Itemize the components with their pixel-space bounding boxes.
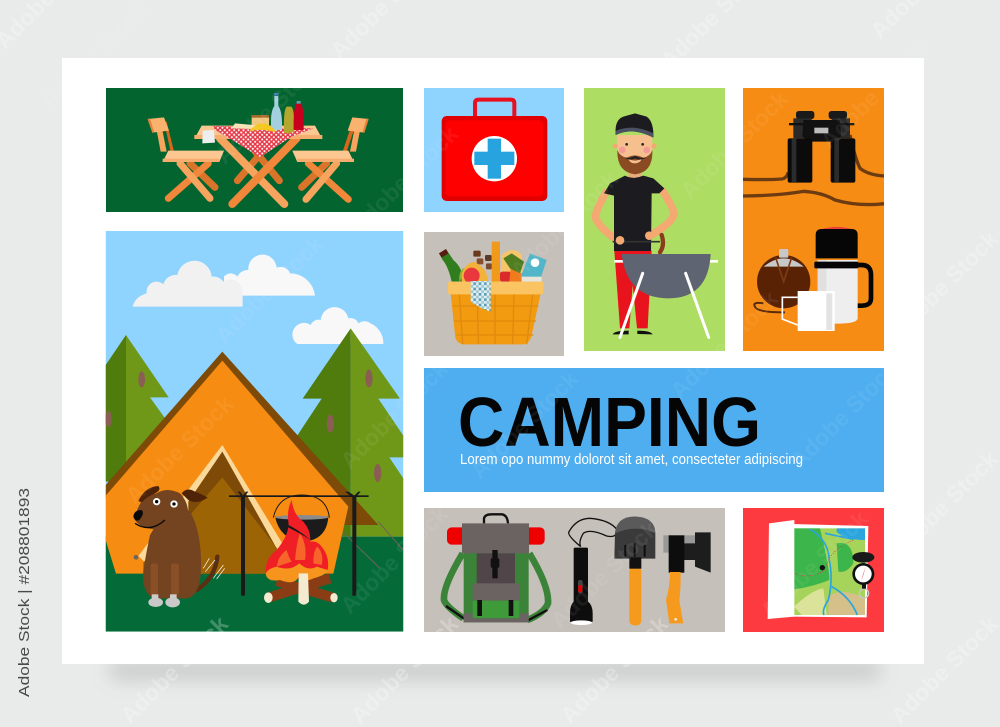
watermarks on background: Adobe Stock — [885, 446, 1000, 564]
icon: basket — [448, 242, 543, 344]
watermarks: Adobe Stock — [465, 366, 583, 484]
icon: right chair — [292, 117, 369, 199]
icon: bottles and food — [202, 93, 304, 143]
watermarks: Adobe Stock — [755, 506, 873, 624]
icon: compass — [852, 552, 874, 598]
watermarks: Adobe Stock — [675, 86, 793, 204]
icon: map fold — [768, 520, 794, 619]
watermarks on background: Adobe Stock — [115, 611, 233, 727]
tent — [106, 352, 378, 574]
icon: grill — [614, 254, 718, 337]
cloud front — [133, 261, 243, 307]
watermarks: Adobe Stock — [210, 51, 328, 169]
icon: left chair — [148, 117, 224, 198]
dog — [133, 486, 225, 607]
ground — [106, 537, 403, 632]
panel: camp scene — [105, 231, 404, 632]
subheading: Lorem opo nummy dolorot sit amet, consecteter adipiscing — [460, 452, 803, 468]
heading: CAMPING — [458, 383, 761, 461]
watermarks — [35, 0, 933, 634]
panel: picnic basket — [424, 232, 564, 356]
icon: food — [439, 249, 547, 284]
watermarks on background: Adobe Stock — [345, 611, 463, 727]
panel: man with grill — [584, 88, 725, 351]
watermarks on background: Adobe Stock — [555, 611, 673, 727]
icon: backpack — [444, 514, 548, 622]
icon: shovel — [614, 517, 655, 625]
watermarks: Adobe Stock — [210, 231, 328, 349]
icon: binoculars — [788, 111, 855, 183]
icon: map — [792, 524, 868, 617]
fire — [264, 500, 338, 605]
figure: man — [595, 113, 674, 334]
guy ropes — [342, 522, 404, 568]
white card — [62, 58, 924, 664]
watermarks: Adobe Stock — [335, 356, 453, 474]
icon: table — [194, 126, 322, 204]
panel: map and compass — [743, 508, 884, 632]
icon: axe — [663, 532, 711, 623]
watermarks: Adobe Stock — [665, 286, 783, 404]
icon: flashlight — [569, 518, 617, 625]
watermarks: Adobe Stock — [335, 501, 453, 619]
watermarks: Adobe Stock — [545, 516, 663, 634]
tree right — [287, 328, 403, 537]
watermarks: Adobe Stock — [345, 121, 463, 239]
icon: strap — [743, 135, 884, 205]
panel: hiking tools — [424, 508, 725, 632]
stock id caption: Adobe Stock | #208801893 — [16, 488, 33, 697]
cloud right — [292, 307, 383, 344]
panel: title banner — [424, 368, 884, 492]
icon: thermos — [814, 227, 871, 324]
cloud back — [224, 255, 315, 296]
tree left — [106, 335, 169, 482]
icon: flask — [754, 249, 810, 312]
watermarks: Adobe Stock — [120, 391, 238, 509]
panel: binoculars and thermos — [743, 88, 884, 351]
card shadow — [110, 660, 880, 680]
icon: first aid case — [442, 100, 547, 201]
icon: mug — [782, 291, 835, 331]
watermarks: Adobe Stock — [505, 166, 623, 284]
panel: picnic table — [106, 88, 403, 212]
campfire stand and pot — [229, 492, 369, 596]
panel: first aid kit — [424, 88, 564, 212]
watermarks on background: Adobe Stock — [885, 226, 1000, 344]
watermarks: Adobe Stock — [815, 36, 933, 154]
watermarks: Adobe Stock — [785, 356, 903, 474]
